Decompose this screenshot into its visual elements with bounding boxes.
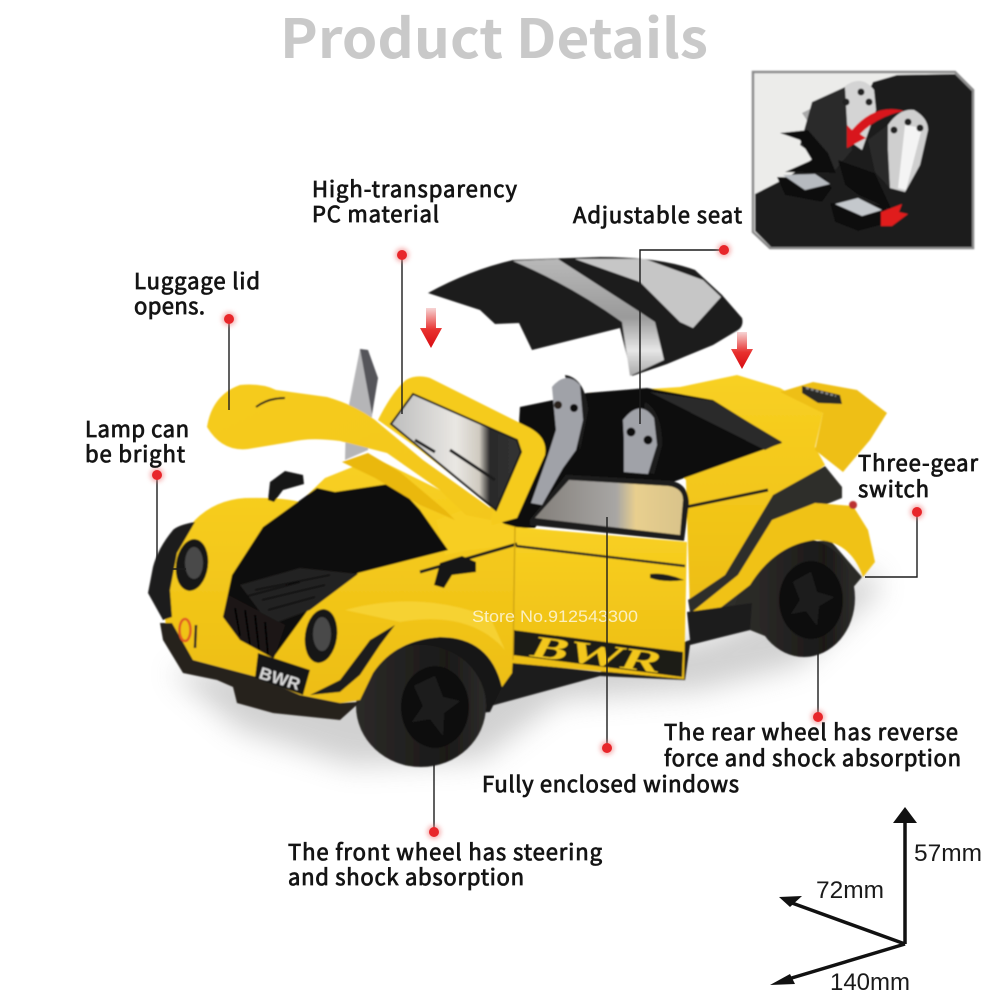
inset: adjustable seat detail xyxy=(753,72,973,248)
rear fender xyxy=(692,503,875,612)
watermark: Store No.912543300 xyxy=(472,608,638,626)
door: BWR xyxy=(525,629,672,679)
label: three-gear switch: Three-gear xyxy=(858,446,978,478)
label: rear wheel: The rear wheel has reverse xyxy=(664,715,958,747)
rear arch flare xyxy=(688,466,842,612)
front guard, left xyxy=(148,522,195,620)
car illustration xyxy=(148,257,887,767)
front lower skirt xyxy=(160,623,360,720)
label: rear wheel: force and shock absorption xyxy=(664,741,961,773)
headlight, right xyxy=(301,607,341,665)
far door panel xyxy=(345,349,378,460)
rear arch underside xyxy=(690,540,862,650)
under-body sill xyxy=(487,603,752,707)
label: lamp can be bright xyxy=(85,412,189,469)
front fender highlight xyxy=(345,601,505,650)
roof panel xyxy=(428,257,742,376)
open luggage lid xyxy=(207,385,493,520)
label: luggage lid opens: opens. xyxy=(134,289,205,321)
label: high-transparency PC material: High-transparency xyxy=(312,172,518,204)
BWR stripe xyxy=(512,630,683,677)
front right wing crease xyxy=(310,625,395,695)
label: high-transparency PC material: PC material xyxy=(312,197,439,229)
dimension diagram: 57mm xyxy=(914,840,982,867)
label: adjustable seat: Adjustable seat xyxy=(573,198,742,230)
label: front wheel: and shock absorption xyxy=(288,860,524,892)
driver mirrors xyxy=(268,471,304,502)
label: luggage lid opens xyxy=(134,264,260,321)
windshield frame xyxy=(378,376,545,525)
label: front wheel xyxy=(288,835,603,892)
label: front wheel: The front wheel has steering xyxy=(288,835,603,867)
seat, near side xyxy=(623,402,662,474)
seat, far side xyxy=(531,375,588,505)
label: three-gear switch: switch xyxy=(858,472,929,504)
emblem xyxy=(180,619,190,641)
front body xyxy=(164,458,516,703)
red arrow: roof left xyxy=(420,308,442,348)
label: high-transparency PC material xyxy=(312,172,518,229)
front trunk opening xyxy=(223,483,448,658)
front wheel xyxy=(356,645,486,767)
red arrow: roof right xyxy=(731,332,753,369)
front arch underside xyxy=(373,637,502,720)
dimension diagram: 72mm xyxy=(816,877,884,904)
headlight, left xyxy=(173,537,211,593)
rear deck and quarter panel xyxy=(588,375,825,612)
rear wheel xyxy=(753,539,855,657)
label: rear wheel xyxy=(664,715,961,773)
label: lamp can be bright: Lamp can xyxy=(85,412,189,444)
callout leader lines xyxy=(157,250,917,832)
door seam and cowl xyxy=(436,505,517,555)
label: luggage lid opens: Luggage lid xyxy=(134,264,260,296)
car ground shadow xyxy=(170,570,880,765)
open cabin interior xyxy=(495,388,782,528)
label: three-gear switch xyxy=(858,446,978,504)
number plate: BWR xyxy=(257,664,303,694)
dimension diagram: 140mm xyxy=(830,969,910,996)
dimension diagram xyxy=(770,807,982,996)
spoiler with switch xyxy=(780,382,887,472)
number plate xyxy=(255,653,310,695)
label: fully enclosed windows: Fully enclosed windows xyxy=(482,767,739,799)
door xyxy=(512,475,768,679)
callout dots xyxy=(150,243,924,839)
label: lamp can be bright: be bright xyxy=(85,437,185,469)
